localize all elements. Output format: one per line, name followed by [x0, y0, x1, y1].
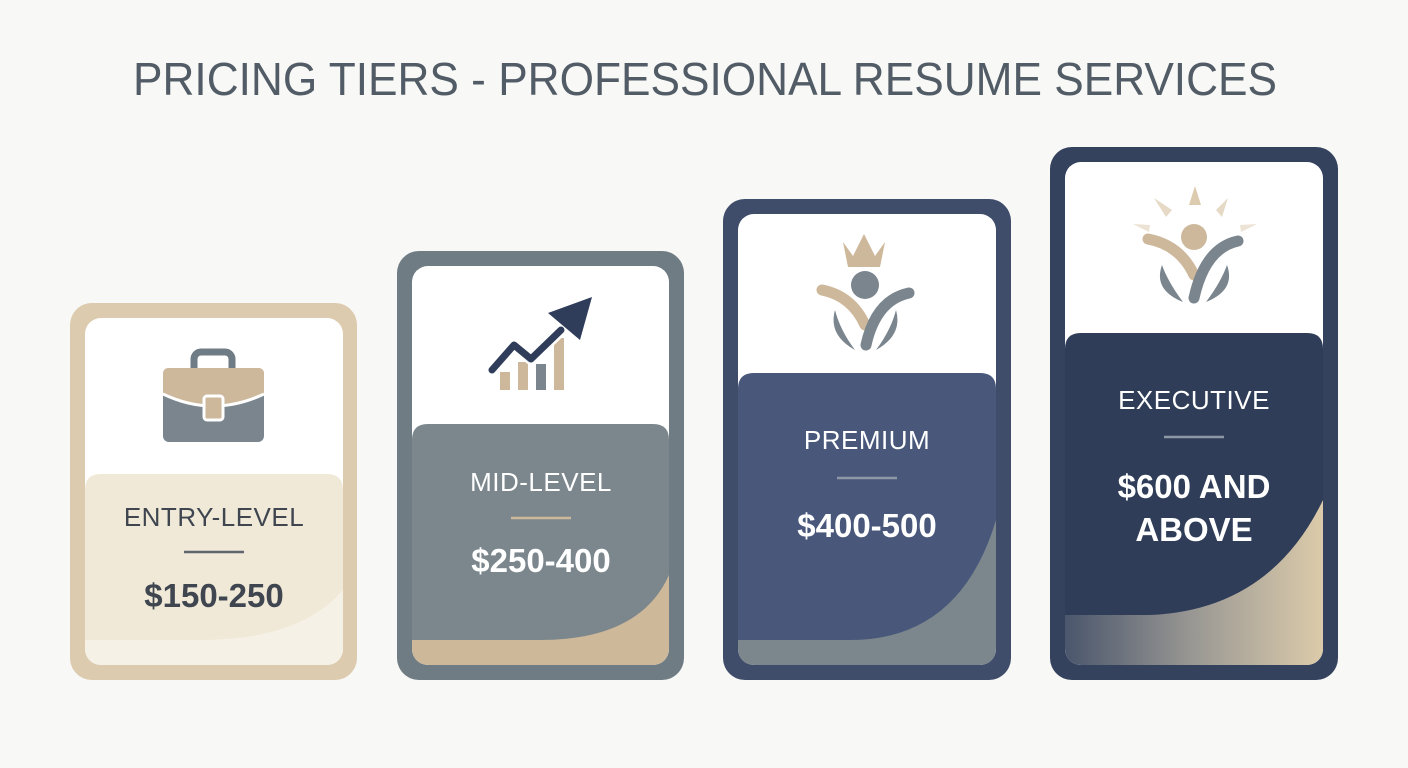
text: premium price: $400-500: [797, 507, 937, 544]
icon: briefcase: [163, 352, 264, 442]
panel: premium: [723, 199, 1011, 689]
title: PRICING TIERS - PROFESSIONAL RESUME SERVICES: [133, 53, 1277, 105]
icon: crowned figure: [822, 234, 909, 350]
text: entry price: $150-250: [144, 577, 284, 614]
icon: growth chart: [492, 297, 592, 390]
panel: executive: [1050, 147, 1338, 689]
panel: entry-level: [70, 303, 357, 690]
text: mid price: $250-400: [471, 542, 611, 579]
panel: mid-level: [397, 251, 684, 690]
text: executive label: EXECUTIVE: [1118, 385, 1270, 415]
text: mid-level label: MID-LEVEL: [470, 467, 612, 497]
panel: executive: ABOVE: [1135, 511, 1253, 548]
text: premium label: PREMIUM: [804, 425, 930, 455]
text: entry-level label: ENTRY-LEVEL: [124, 502, 304, 532]
text: executive price: $600 AND: [1118, 468, 1270, 505]
icon: executive figure with sun: [1133, 186, 1257, 302]
